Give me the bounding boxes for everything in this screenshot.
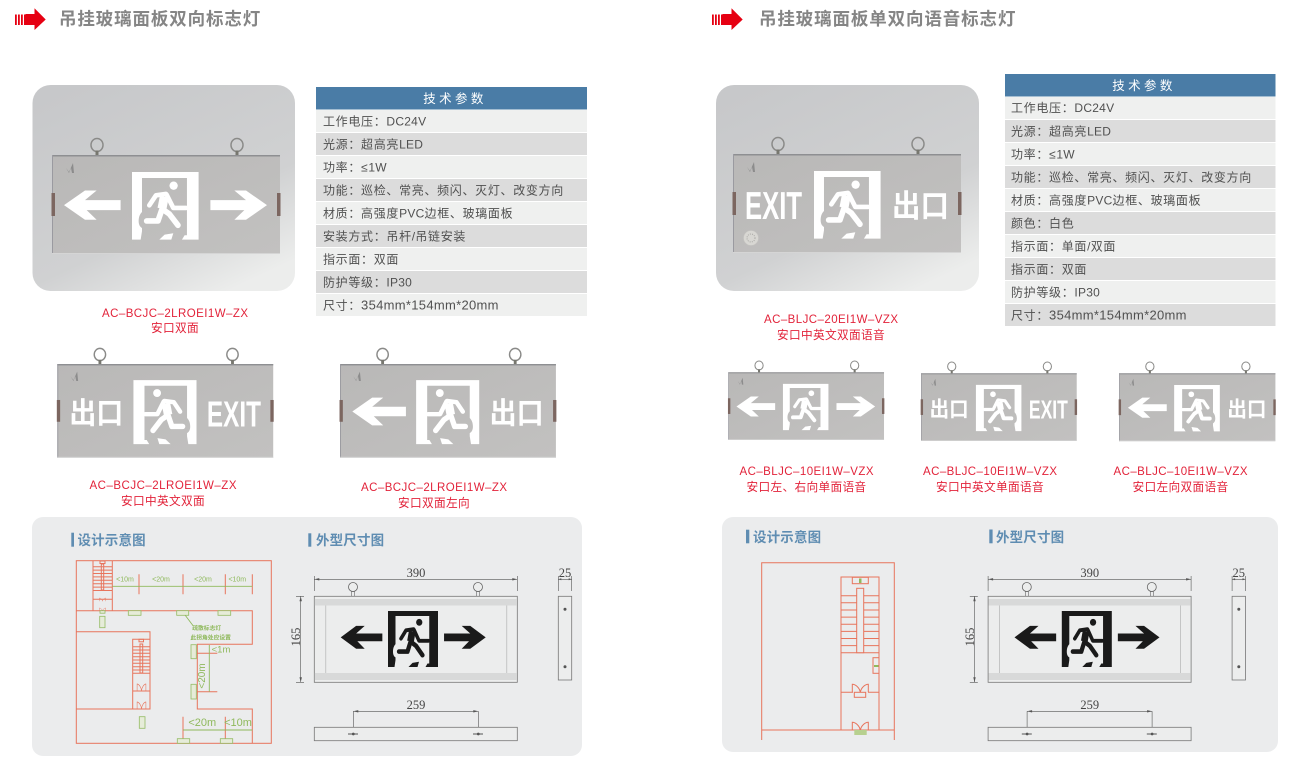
- panel: technical parameters table: 工作电压：DC24V: [323, 114, 426, 128]
- panel: technical parameters table: 防护等级：IP30: [323, 274, 412, 290]
- caption: main sign model: [102, 308, 248, 335]
- caption: main voice sign model: AC–BLJC–20EI1W–VZX: [764, 314, 898, 326]
- heading: design schematic: 设计示意图: [753, 529, 821, 545]
- dimension drawing: right: 165: [963, 628, 977, 646]
- dimension drawing: left: [289, 566, 572, 741]
- floor plan: design schematic left: [76, 561, 271, 743]
- panel: technical parameters table: 功率：≤1W: [1011, 146, 1075, 162]
- section: left product: [15, 8, 587, 756]
- section: right product: [712, 8, 1278, 752]
- sign: chinese and english double face: [57, 348, 274, 458]
- dimension drawing: left: 165: [289, 628, 303, 646]
- caption: left and right arrows voice: AC–BLJC–10EI1W–VZX: [740, 466, 874, 478]
- panel: technical parameters table: 光源：超高亮LED: [323, 136, 423, 152]
- sign: left arrow double face: [340, 348, 556, 458]
- sign: chinese and english voice: 出口: [930, 397, 969, 421]
- caption: chinese and english double face: 安口中英文双面: [121, 494, 205, 508]
- floor plan: design schematic left: <10m: [116, 576, 134, 584]
- floor plan: design schematic left: <20m: [188, 717, 216, 729]
- dimension drawing: right: [963, 566, 1246, 741]
- caption: left arrow double face: [361, 482, 507, 510]
- caption: left arrow voice: 安口左向双面语音: [1133, 480, 1228, 494]
- title: 吊挂玻璃面板单双向语音标志灯: [759, 9, 1016, 29]
- caption: left arrow double face: 安口双面左向: [398, 496, 470, 510]
- caption: main sign model: AC–BCJC–2LROEI1W–ZX: [102, 308, 248, 320]
- heading: outline dimensions: 外型尺寸图: [996, 529, 1064, 545]
- panel: technical parameters table: 尺寸：354mm*154mm*20mm: [1011, 308, 1187, 322]
- sign: chinese and english double face: EXIT: [207, 394, 261, 435]
- photo panel: main double arrow sign: [32, 85, 295, 291]
- panel: technical parameters table: 功能：巡检、常亮、频闪、灭灯、改变方向: [323, 182, 564, 198]
- photo panel: main exit voice sign: [716, 85, 979, 291]
- caption: main voice sign model: [764, 314, 898, 342]
- sign: chinese and english double face: 出口: [69, 398, 123, 431]
- floor plan: design schematic left: <10m: [228, 576, 246, 584]
- sign: chinese and english voice: EXIT: [1029, 394, 1068, 424]
- panel: technical parameters table: 指示面：单面/双面: [1011, 238, 1116, 254]
- panel: technical parameters table: [316, 87, 587, 316]
- sign: exit voice: [732, 138, 962, 253]
- sign: chinese and english voice: [921, 362, 1077, 441]
- dimension drawing: right: 390: [1080, 566, 1099, 580]
- dimension drawing: left: 25: [559, 566, 571, 580]
- floor plan: design schematic left: <20m: [152, 576, 170, 584]
- panel: technical parameters table: 工作电压：DC24V: [1011, 101, 1114, 115]
- sign: left arrow voice: [1119, 362, 1276, 441]
- panel: technical parameters table: 安装方式：吊杆/吊链安装: [323, 228, 466, 244]
- panel: technical parameters table: 功能：巡检、常亮、频闪、灭灯、改变方向: [1011, 170, 1252, 184]
- heading icon: red arrow: [15, 8, 46, 30]
- sign: exit voice: EXIT: [745, 185, 802, 228]
- caption: chinese and english double face: [90, 480, 237, 508]
- caption: main sign model: 安口双面: [151, 321, 199, 335]
- panel: technical parameters table: 材质：高强度PVC边框、玻璃面板: [1011, 192, 1201, 208]
- caption: chinese and english voice: [923, 466, 1057, 494]
- panel: technical parameters table: 功率：≤1W: [323, 160, 387, 174]
- sign: left arrow voice: 出口: [1227, 398, 1266, 422]
- sign: double arrow: [52, 138, 280, 254]
- panel: technical parameters table: 尺寸：354mm*154mm*20mm: [323, 298, 499, 312]
- panel: technical parameters table: 材质：高强度PVC边框、玻璃面板: [323, 206, 513, 220]
- panel: technical parameters table: 技术参数: [1112, 78, 1176, 93]
- panel: technical parameters table: 光源：超高亮LED: [1011, 124, 1111, 138]
- sign: left and right arrows voice: [728, 361, 884, 440]
- floor plan: design schematic right: [762, 563, 894, 740]
- caption: chinese and english double face: AC–BCJC–2LROEI1W–ZX: [90, 480, 237, 492]
- panel: technical parameters table: 技术参数: [423, 91, 487, 106]
- panel: left diagrams background: [32, 517, 582, 756]
- panel: technical parameters table: [1005, 74, 1276, 326]
- floor plan: design schematic left: <20m: [194, 576, 212, 584]
- panel: technical parameters table: 指示面：双面: [323, 252, 399, 266]
- heading: outline dimensions: 外型尺寸图: [316, 532, 384, 548]
- floor plan: design schematic left: 疏散标志灯: [192, 624, 221, 632]
- floor plan: design schematic left: <10m: [224, 717, 252, 729]
- dimension drawing: left: 390: [407, 566, 425, 580]
- caption: left arrow double face: AC–BCJC–2LROEI1W–ZX: [361, 482, 507, 494]
- panel: technical parameters table: 指示面：双面: [1011, 262, 1087, 276]
- title: 吊挂玻璃面板双向标志灯: [59, 9, 261, 29]
- caption: left and right arrows voice: 安口左、右向单面语音: [747, 480, 866, 494]
- heading icon: red arrow: [712, 8, 743, 30]
- dimension drawing: left: 259: [407, 698, 425, 712]
- panel: right diagrams background: [722, 517, 1278, 752]
- floor plan: design schematic left: <1m: [212, 644, 230, 656]
- floor plan: design schematic left: 此拐角处应设置: [190, 634, 231, 642]
- sign: exit voice: 出口: [892, 189, 949, 224]
- sign: left arrow double face: 出口: [490, 398, 544, 431]
- panel: technical parameters table: 颜色：白色: [1011, 216, 1074, 230]
- floor plan: design schematic left: <20m: [197, 663, 208, 689]
- dimension drawing: right: 259: [1080, 698, 1099, 712]
- caption: left arrow voice: [1114, 466, 1248, 494]
- icon: speaker: [744, 230, 758, 246]
- caption: chinese and english voice: AC–BLJC–10EI1W–VZX: [923, 466, 1057, 478]
- caption: left arrow voice: AC–BLJC–10EI1W–VZX: [1114, 466, 1248, 478]
- caption: main voice sign model: 安口中英文双面语音: [777, 328, 885, 342]
- dimension drawing: right: 25: [1233, 566, 1245, 580]
- caption: chinese and english voice: 安口中英文单面语音: [936, 480, 1044, 494]
- caption: left and right arrows voice: [740, 466, 874, 494]
- panel: technical parameters table: 防护等级：IP30: [1011, 284, 1100, 300]
- heading: design schematic: 设计示意图: [78, 532, 146, 548]
